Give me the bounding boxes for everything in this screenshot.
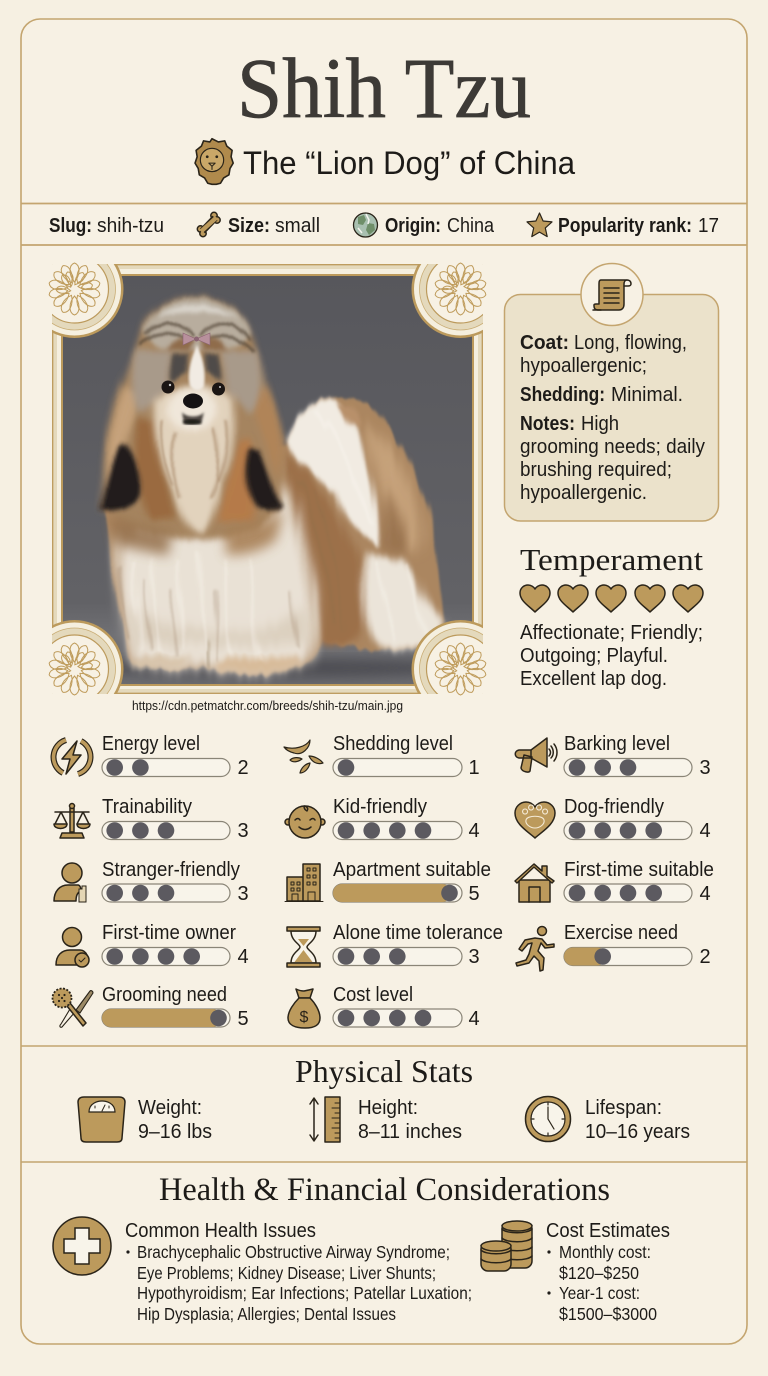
icon: money bag <box>288 989 320 1028</box>
rating: trainability: Trainability <box>102 796 192 818</box>
corner: bottom left <box>26 620 124 718</box>
gap between front legs <box>205 640 208 668</box>
icon: height ruler <box>310 1097 340 1142</box>
temperament text <box>520 622 703 690</box>
dark rump shading <box>384 490 406 560</box>
hearts <box>520 585 703 612</box>
slug: shih-tzu <box>97 215 164 237</box>
dome stripes <box>140 323 254 352</box>
rating: dog-friendly <box>515 796 711 842</box>
icon: paw heart <box>515 802 555 838</box>
rating: dog-friendly: 4 <box>699 820 711 842</box>
framed dog photo <box>48 262 486 696</box>
heading: Temperament <box>520 542 703 577</box>
common health issues: Brachycephalic Obstructive Airway Syndrome; <box>137 1242 450 1262</box>
rating: exercise need <box>516 922 711 971</box>
rating: shedding level: Shedding level <box>333 733 453 755</box>
weight text: Weight: <box>138 1097 202 1119</box>
dog: collar left <box>112 515 172 556</box>
dog: furred head <box>101 297 285 539</box>
hair mass <box>102 297 283 539</box>
dog: white blaze <box>189 345 205 390</box>
icon: money bag: $ <box>300 1009 309 1026</box>
dome grey <box>144 298 251 351</box>
white chest and front legs <box>117 482 316 673</box>
dog photo <box>63 276 472 684</box>
notes text: grooming needs; daily <box>520 436 705 458</box>
rating: energy level: 2 <box>237 757 249 779</box>
brown flank <box>283 450 366 648</box>
dog: eyes <box>162 380 225 396</box>
brown inner left <box>135 420 176 520</box>
shedding text: Shedding: <box>520 384 605 406</box>
icon: lion head <box>195 139 233 184</box>
rating: energy level <box>54 733 249 779</box>
rating: dog-friendly: Dog-friendly <box>564 796 664 818</box>
corner: top right <box>412 240 510 338</box>
icon: balance scales <box>54 804 90 838</box>
rating: stranger-friendly: Stranger-friendly <box>102 859 240 881</box>
rating: first-time suitable <box>515 859 714 905</box>
corner: top left <box>26 240 124 338</box>
coat text: Long, flowing, <box>574 332 687 354</box>
icon: feathers <box>284 740 323 773</box>
rating: barking level: Barking level <box>564 733 670 755</box>
icon: star <box>527 213 552 237</box>
shedding text: Minimal. <box>611 384 683 406</box>
notes text: hypoallergenic. <box>520 482 647 504</box>
side grey hair <box>131 350 262 415</box>
brown crown under stripes <box>166 337 228 352</box>
panel: physical stats <box>78 1053 690 1143</box>
icon: clock <box>526 1096 570 1142</box>
rating: trainability: 3 <box>237 820 249 842</box>
origin: Origin: <box>385 215 441 237</box>
size: Size: <box>228 215 270 237</box>
height text: 8–11 inches <box>358 1121 462 1143</box>
rating: energy level: Energy level <box>102 733 200 755</box>
icon: coin stacks <box>481 1221 532 1271</box>
icon: brush and comb <box>52 988 93 1027</box>
weight text <box>138 1097 212 1143</box>
rump tan highlight <box>365 425 421 553</box>
coat text <box>520 332 687 377</box>
icon: weight scale <box>78 1097 125 1142</box>
common health issues: Hip Dysplasia; Allergies; Dental Issues <box>137 1304 396 1324</box>
beard shade strands <box>162 420 227 498</box>
info bar <box>49 212 719 237</box>
shedding text <box>520 384 683 406</box>
rating: exercise need: 2 <box>699 946 711 968</box>
temperament <box>520 542 703 690</box>
lifespan text: 10–16 years <box>585 1121 690 1143</box>
icon: hourglass <box>287 927 320 967</box>
chest warm shade <box>130 600 308 645</box>
lifespan text <box>585 1097 690 1143</box>
left black ear <box>101 444 141 510</box>
white tail <box>286 399 380 547</box>
rating: cost level <box>288 984 480 1030</box>
grey eye patches <box>169 354 222 382</box>
popularity rank: 17 <box>698 215 719 237</box>
icon: bone <box>197 212 220 237</box>
dome top highlight <box>158 304 238 318</box>
tan tail streak <box>336 404 360 426</box>
rating: cost level: 4 <box>468 1008 480 1030</box>
common health issues <box>125 1220 472 1324</box>
height text: Height: <box>358 1097 418 1119</box>
rating: grooming need: 5 <box>237 1008 249 1030</box>
rating: alone time tolerance: 3 <box>468 946 480 968</box>
rating: barking level <box>515 733 711 779</box>
subtitle text: The “Lion Dog” of China <box>243 145 575 181</box>
height text <box>358 1097 462 1143</box>
orange inner right <box>218 440 256 522</box>
rating: stranger-friendly: 3 <box>237 883 249 905</box>
notes text: brushing required; <box>520 459 672 481</box>
lifespan text: Lifespan: <box>585 1097 662 1119</box>
dog: hair bow <box>183 333 210 345</box>
icon: runner <box>516 926 554 971</box>
icon: megaphone <box>515 738 557 772</box>
rating: first-time owner <box>56 922 249 968</box>
corner ornaments <box>26 240 510 718</box>
corner: bottom right <box>412 620 510 718</box>
cost estimates <box>546 1220 670 1324</box>
common health issues: Common Health Issues <box>125 1220 316 1242</box>
rating: alone time tolerance: Alone time tolerance <box>333 922 503 944</box>
subtitle with lion icon <box>195 139 575 184</box>
icon: baby face <box>285 806 325 838</box>
weight text: 9–16 lbs <box>138 1121 212 1143</box>
outer tan right <box>257 386 286 464</box>
rating: exercise need: Exercise need <box>564 922 678 944</box>
rating: stranger-friendly <box>54 859 249 905</box>
body silhouette <box>102 397 446 673</box>
dog: furred body <box>102 397 446 673</box>
notes text: High <box>581 413 619 435</box>
image url caption: https://cdn.petmatchr.com/breeds/shih-tzu/main.jpg <box>132 699 403 713</box>
rating: first-time owner: 4 <box>237 946 249 968</box>
slug: Slug: <box>49 215 92 237</box>
temperament text: Affectionate; Friendly; <box>520 622 703 644</box>
icon: person with hand <box>54 863 86 902</box>
chest fur strands <box>132 564 410 661</box>
temperament text: Outgoing; Playful. <box>520 645 668 667</box>
icon: medical cross <box>53 1217 111 1275</box>
rating: apartment suitable <box>285 859 491 905</box>
rating: cost level: Cost level <box>333 984 413 1006</box>
dog: nose and mouth <box>182 394 204 424</box>
heading: Health & Financial Considerations <box>159 1172 610 1208</box>
rating: barking level: 3 <box>699 757 711 779</box>
flowers <box>48 263 487 695</box>
common health issues: Eye Problems; Kidney Disease; Liver Shunts; <box>137 1263 436 1283</box>
cost estimates: Year-1 cost: <box>559 1283 640 1303</box>
header divider lines <box>21 204 747 245</box>
panel: coat notes <box>504 264 718 521</box>
rating: shedding level: 1 <box>468 757 480 779</box>
temperament text: Excellent lap dog. <box>520 668 667 690</box>
muzzle <box>167 389 217 431</box>
cost estimates: Cost Estimates <box>546 1220 670 1242</box>
outer tan left <box>107 385 142 490</box>
origin: China <box>447 215 495 237</box>
rating: kid-friendly: 4 <box>468 820 480 842</box>
rating: apartment suitable: Apartment suitable <box>333 859 491 881</box>
cost estimates: $120–$250 <box>559 1263 639 1283</box>
rating: kid-friendly <box>285 796 480 842</box>
icon: person with check <box>56 928 89 967</box>
icon: globe <box>354 213 378 237</box>
notes text: Notes: <box>520 413 575 435</box>
rating: first-time suitable: 4 <box>699 883 711 905</box>
coat text: Coat: <box>520 332 569 354</box>
floor shadow <box>90 658 470 678</box>
panel box <box>504 294 718 521</box>
paw tints <box>212 656 300 672</box>
panel: health and financial <box>53 1172 670 1324</box>
icon: energy bolt <box>54 740 90 774</box>
notes text <box>520 413 705 504</box>
heading: Physical Stats <box>295 1053 473 1089</box>
cost estimates: $1500–$3000 <box>559 1304 657 1324</box>
title: Shih Tzu <box>237 40 531 136</box>
rating: grooming need: Grooming need <box>102 984 227 1006</box>
size <box>228 215 320 237</box>
rating: alone time tolerance <box>287 922 503 968</box>
frame bands <box>52 264 483 694</box>
right black ear <box>246 450 285 510</box>
icon: scroll badge <box>581 264 643 326</box>
central beard <box>154 386 234 534</box>
rating: kid-friendly: Kid-friendly <box>333 796 427 818</box>
slug <box>49 215 164 237</box>
icon: house <box>515 864 554 902</box>
coat text: hypoallergenic; <box>520 355 647 377</box>
rating: first-time owner: First-time owner <box>102 922 236 944</box>
white back leg <box>361 554 445 650</box>
origin <box>385 215 495 237</box>
size: small <box>275 215 320 237</box>
dog: collar right <box>226 510 284 555</box>
cost estimates: Monthly cost: <box>559 1242 651 1262</box>
rating: first-time suitable: First-time suitable <box>564 859 714 881</box>
rating: grooming need <box>52 984 249 1030</box>
rating: apartment suitable: 5 <box>468 883 480 905</box>
section dividers <box>21 1046 747 1162</box>
icon: apartment buildings <box>285 864 323 902</box>
rating: shedding level <box>284 733 480 779</box>
common health issues: Hypothyroidism; Ear Infections; Patellar Luxation; <box>137 1283 472 1303</box>
popularity rank: Popularity rank: <box>558 215 692 237</box>
rating: trainability <box>54 796 249 842</box>
